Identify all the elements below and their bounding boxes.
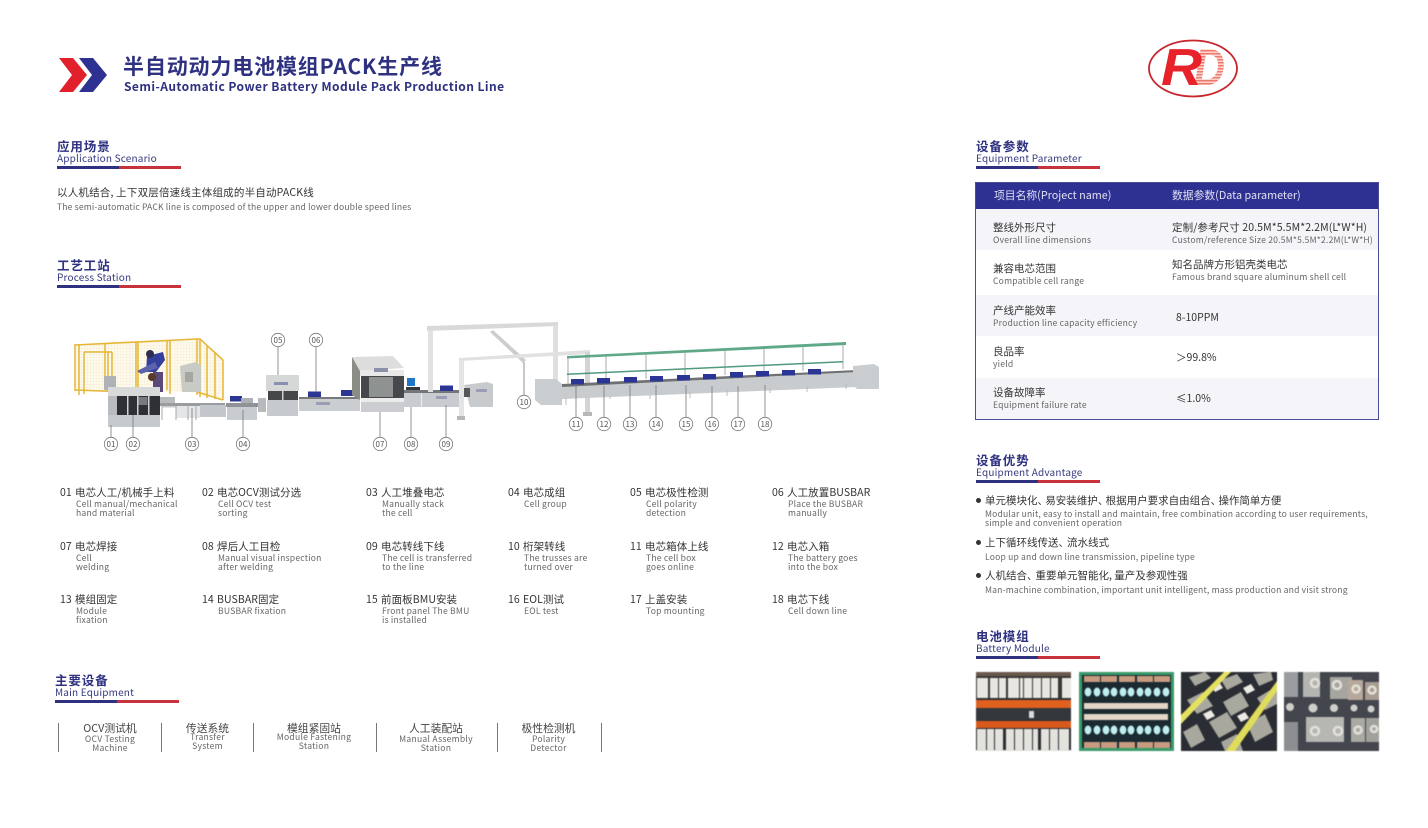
station 02: 02 xyxy=(202,485,214,500)
station 09 xyxy=(366,539,472,573)
station 08: after welding xyxy=(218,561,273,573)
logo: D xyxy=(1194,39,1225,97)
station 07: Cell xyxy=(76,552,92,564)
station 01 02 xyxy=(104,376,160,427)
number labels xyxy=(107,335,770,450)
row: cell range: Famous brand square aluminum shell cell xyxy=(1172,271,1346,283)
station 10: turned over xyxy=(524,561,573,573)
row: capacity: Production line capacity efficiency xyxy=(993,317,1137,329)
text block: application scenario: The semi-automatic PACK line is composed of the upper and lower double speed lines xyxy=(57,201,411,213)
station 17: Top mounting xyxy=(646,605,705,617)
equipment: OCV tester: OCV Testing xyxy=(85,733,135,745)
row: capacity: 产线产能效率 xyxy=(993,303,1056,318)
equipment: polarity detector xyxy=(522,720,576,754)
equipment: OCV tester xyxy=(83,720,137,754)
equipment: module fastening xyxy=(277,720,351,752)
station 12: The battery goes xyxy=(788,552,858,564)
number labels: 16 xyxy=(708,419,717,430)
table header xyxy=(976,183,1378,209)
equipment row xyxy=(58,720,602,754)
station 02 xyxy=(202,485,301,519)
number labels: 10 xyxy=(520,397,529,408)
station 06 xyxy=(772,485,870,519)
station 16 xyxy=(508,592,564,617)
station 04: Cell group xyxy=(524,498,567,510)
station 15: Front panel The BMU xyxy=(382,605,469,617)
station 01: hand material xyxy=(76,507,135,519)
row: yield: yield xyxy=(993,358,1013,370)
station 05: Cell polarity xyxy=(646,498,697,510)
number labels: 04 xyxy=(239,439,248,450)
station 16: EOL test xyxy=(524,605,559,617)
station 07 xyxy=(352,356,404,412)
row: yield: 良品率 xyxy=(993,344,1024,359)
advantage 3: Man-machine combination, important unit intelligent, mass production and visit strong xyxy=(985,584,1348,596)
section heading: equipment advantage: Equipment Advantage xyxy=(976,464,1083,479)
station 11 xyxy=(630,539,708,573)
equipment: polarity detector: Polarity xyxy=(532,733,565,745)
number labels: 18 xyxy=(761,419,770,430)
station 10: 桁架转线 xyxy=(523,539,565,554)
advantage 2: Loop up and down line transmission, pipeline type xyxy=(985,551,1195,563)
station 03: Manually stack xyxy=(382,498,444,510)
station 01: Cell manual/mechanical xyxy=(76,498,178,510)
station 08 xyxy=(202,539,322,573)
section heading: battery module: 电池模组 xyxy=(976,626,1030,645)
station 13: Module xyxy=(76,605,107,617)
station 09: 09 xyxy=(366,539,378,554)
text block: application scenario xyxy=(57,185,411,213)
row: dimensions xyxy=(976,209,1378,250)
station 11: 电芯箱体上线 xyxy=(645,539,708,554)
station 03: 03 xyxy=(366,485,378,500)
number labels: 01 xyxy=(107,439,115,450)
row: dimensions: Overall line dimensions xyxy=(993,234,1091,246)
table header: 数据参数(Data parameter) xyxy=(1172,187,1301,203)
station 03: 人工堆叠电芯 xyxy=(381,485,444,500)
advantage 3 xyxy=(976,568,1348,596)
station 18: 18 xyxy=(772,592,784,607)
number labels: 09 xyxy=(442,439,450,450)
icon: double chevron xyxy=(59,58,107,92)
row: failure rate xyxy=(976,378,1378,419)
station 08: 08 xyxy=(202,539,214,554)
station 12: into the box xyxy=(788,561,838,573)
station 09: The cell is transferred xyxy=(382,552,472,564)
section heading: equipment parameter: Equipment Parameter xyxy=(976,150,1082,165)
row: dimensions: 整线外形尺寸 xyxy=(993,220,1056,235)
advantage 1: simple and convenient operation xyxy=(985,517,1122,529)
equipment: transfer system xyxy=(186,720,229,752)
station 18: 电芯下线 xyxy=(787,592,829,607)
station 15: is installed xyxy=(382,614,427,626)
row: dimensions: 定制/参考尺寸 20.5M*5.5M*2.2M(L*W*H) xyxy=(1172,220,1367,235)
station 15 xyxy=(366,592,469,626)
section heading: application scenario xyxy=(57,136,181,169)
station 15: 15 xyxy=(366,592,378,607)
section heading: main equipment xyxy=(55,670,179,703)
station 12 xyxy=(772,539,858,573)
number labels: 07 xyxy=(376,439,385,450)
row: failure rate: Equipment failure rate xyxy=(993,399,1087,411)
photo: battery module 2 xyxy=(1078,671,1175,752)
station 14: 14 xyxy=(202,592,214,607)
row: failure rate: 设备故障率 xyxy=(993,385,1046,400)
station 02: Cell OCV test xyxy=(218,498,271,510)
station 14: BUSBAR固定 xyxy=(217,592,279,607)
leader lines xyxy=(111,347,765,437)
row: yield: ＞99.8% xyxy=(1176,350,1217,365)
section heading: application scenario: Application Scenario xyxy=(57,150,157,165)
station 06: 06 xyxy=(772,485,784,500)
section heading: main equipment: 主要设备 xyxy=(55,670,109,689)
station 13: fixation xyxy=(76,614,108,626)
station 05: detection xyxy=(646,507,686,519)
equipment: polarity detector: Detector xyxy=(530,742,567,754)
equipment: manual assembly: 人工装配站 xyxy=(409,720,463,736)
row: cell range: Compatible cell range xyxy=(993,275,1084,287)
station 03 xyxy=(366,485,444,519)
row: dimensions: Custom/reference Size 20.5M*5.5M*2.2M(L*W*H) xyxy=(1172,234,1373,246)
section heading: application scenario: 应用场景 xyxy=(57,136,111,155)
station 05: 电芯极性检测 xyxy=(645,485,708,500)
station 12: 12 xyxy=(772,539,784,554)
number labels: 15 xyxy=(682,419,690,430)
table header: 项目名称(Project name) xyxy=(994,187,1111,203)
section heading: equipment parameter: 设备参数 xyxy=(976,136,1030,155)
row: yield xyxy=(976,336,1378,378)
row: cell range xyxy=(976,250,1378,295)
fence inner device xyxy=(180,362,201,392)
section heading: battery module: Battery Module xyxy=(976,640,1050,655)
station 05: 05 xyxy=(630,485,642,500)
advantage 1: Modular unit, easy to install and maintain, free combination according to user requirements, xyxy=(985,508,1368,520)
photo: battery module 4 xyxy=(1284,672,1379,751)
station 07: 电芯焊接 xyxy=(75,539,117,554)
advantage 3: 人机结合、重要单元智能化, 量产及参观性强 xyxy=(985,568,1188,583)
number labels: 13 xyxy=(626,419,634,430)
station 04: 04 xyxy=(508,485,520,500)
section heading: equipment advantage xyxy=(976,450,1100,483)
equipment: OCV tester: Machine xyxy=(92,742,128,754)
station 08: 焊后人工目检 xyxy=(217,539,280,554)
station 03: the cell xyxy=(382,507,413,519)
conveyor 03 xyxy=(160,397,226,420)
number labels: 17 xyxy=(734,419,743,430)
section heading: equipment parameter xyxy=(976,136,1100,169)
number labels: 14 xyxy=(652,419,661,430)
equipment: manual assembly xyxy=(399,720,473,754)
station 17: 上盖安装 xyxy=(645,592,687,607)
photo: battery module 1 xyxy=(975,671,1072,752)
row: capacity: 8-10PPM xyxy=(1176,310,1219,325)
station 10: The trusses are xyxy=(524,552,587,564)
subtitle: Semi-Automatic Power Battery Module Pack Production Line xyxy=(124,78,504,95)
number labels: 03 xyxy=(188,439,196,450)
station 07: 07 xyxy=(60,539,72,554)
station 16: 16 xyxy=(508,592,520,607)
station 10: 10 xyxy=(508,539,520,554)
station 02: 电芯OCV测试分选 xyxy=(217,485,301,500)
row: cell range: 兼容电芯范围 xyxy=(993,261,1056,276)
parameter table xyxy=(975,182,1379,420)
photo: battery module 3 xyxy=(1180,671,1278,752)
station 12: 电芯入箱 xyxy=(787,539,829,554)
station 06: 人工放置BUSBAR xyxy=(787,485,870,500)
station 09: to the line xyxy=(382,561,424,573)
section heading: process station xyxy=(57,255,181,288)
row: failure rate: ≤1.0% xyxy=(1176,391,1211,406)
end box 09 xyxy=(464,382,493,407)
station 06: manually xyxy=(788,507,827,519)
station 11: 11 xyxy=(630,539,642,554)
equipment: OCV tester: OCV测试机 xyxy=(83,720,137,736)
station 05 xyxy=(266,375,299,416)
section heading: process station: Process Station xyxy=(57,269,131,284)
logo xyxy=(1148,39,1238,98)
section heading: battery module xyxy=(976,626,1100,659)
production line illustration xyxy=(74,322,879,452)
conveyor 08 09 xyxy=(404,378,464,407)
station 08: Manual visual inspection xyxy=(218,552,322,564)
logo: R xyxy=(1161,39,1202,97)
equipment: transfer system: 传送系统 xyxy=(186,720,229,736)
station 14 xyxy=(202,592,286,617)
fence xyxy=(75,339,223,400)
equipment: polarity detector: 极性检测机 xyxy=(522,720,575,736)
station 04 xyxy=(508,485,567,510)
station 18: Cell down line xyxy=(788,605,847,617)
overhead trusses xyxy=(427,322,592,420)
number labels: 06 xyxy=(312,335,321,346)
station 13 xyxy=(60,592,117,626)
station 04 xyxy=(226,396,266,420)
number badges xyxy=(104,333,772,451)
station 02: sorting xyxy=(218,507,248,519)
station 16: EOL测试 xyxy=(523,592,564,607)
station 15: 前面板BMU安装 xyxy=(381,592,457,607)
station 07: welding xyxy=(76,561,109,573)
equipment: module fastening: Station xyxy=(299,740,329,752)
advantage 1 xyxy=(976,493,1368,529)
station 17: 17 xyxy=(630,592,642,607)
station 09: 电芯转线下线 xyxy=(381,539,444,554)
station 01 xyxy=(60,485,178,519)
long upper line xyxy=(535,342,879,405)
station 06: Place the BUSBAR xyxy=(788,498,863,510)
station 13: 13 xyxy=(60,592,72,607)
section heading: equipment advantage: 设备优势 xyxy=(976,450,1030,469)
row: capacity xyxy=(976,295,1378,336)
robot arm xyxy=(137,350,165,392)
number labels: 11 xyxy=(572,419,580,430)
equipment: transfer system: Transfer xyxy=(190,731,225,743)
advantage 1: 单元模块化、易安装维护、根据用户要求自由组合、操作简单方便 xyxy=(985,493,1281,508)
station 01: 01 xyxy=(60,485,72,500)
title: 半自动动力电池模组PACK生产线 xyxy=(123,51,443,81)
station 04: 电芯成组 xyxy=(523,485,565,500)
section heading: process station: 工艺工站 xyxy=(57,255,111,274)
row: cell range: 知名品牌方形铝壳类电芯 xyxy=(1172,257,1288,272)
text block: application scenario: 以人机结合, 上下双层倍速线主体组成的半自动PACK线 xyxy=(57,185,314,200)
equipment: manual assembly: Station xyxy=(421,742,451,754)
station 13: 模组固定 xyxy=(75,592,117,607)
station 07 xyxy=(60,539,117,573)
conveyor 06 xyxy=(299,390,360,411)
station 01: 电芯人工/机械手上料 xyxy=(75,485,174,500)
equipment: transfer system: System xyxy=(192,740,223,752)
number labels: 02 xyxy=(129,439,138,450)
equipment: module fastening: 模组紧固站 xyxy=(287,720,341,736)
station 17 xyxy=(630,592,705,617)
number labels: 08 xyxy=(407,439,416,450)
station 18 xyxy=(772,592,847,617)
advantage 2: 上下循环线传送、流水线式 xyxy=(985,535,1109,550)
station 14: BUSBAR fixation xyxy=(218,605,286,617)
station 11: The cell box xyxy=(646,552,696,564)
number labels: 12 xyxy=(600,419,609,430)
station 10 xyxy=(508,539,587,573)
station 11: goes online xyxy=(646,561,694,573)
equipment: manual assembly: Manual Assembly xyxy=(399,733,473,745)
section heading: main equipment: Main Equipment xyxy=(55,684,134,699)
equipment: module fastening: Module Fastening xyxy=(277,731,351,743)
number labels: 05 xyxy=(274,335,282,346)
station 05 xyxy=(630,485,708,519)
advantage 2 xyxy=(976,535,1195,563)
